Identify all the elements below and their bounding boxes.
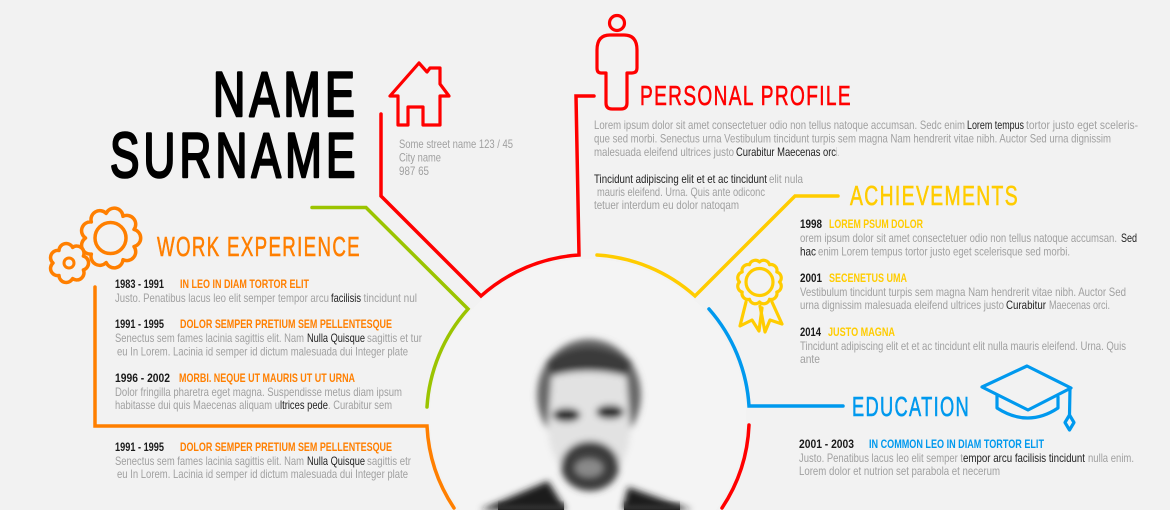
portrait photo — [430, 259, 746, 510]
job 3 — [115, 371, 402, 412]
title: name — [110, 60, 360, 191]
job 1: Justo. Penatibus lacus leo elit semper tempor arcu — [115, 291, 329, 305]
profile text: Lorem tempus — [967, 118, 1024, 132]
achievement 1 — [800, 217, 1137, 258]
education entry: Justo. Penatibus lacus leo elit semper t — [799, 451, 964, 465]
education entry — [799, 437, 1134, 478]
education entry: 2001 - 2003 — [799, 437, 854, 451]
heading: education: EDUCATION — [852, 391, 970, 422]
job 3: . Curabitur sem — [328, 398, 392, 412]
achievement 2: 2001 — [800, 271, 822, 285]
job 2: Nulla Quisque — [307, 331, 365, 345]
job 2: 1991 - 1995 — [115, 317, 164, 331]
profile text: malesuada eleifend ultrices justo — [594, 145, 734, 159]
panel: achievements — [800, 180, 1137, 366]
job 2: sagittis et tur — [367, 331, 422, 345]
achievement 2: urna dignissim malesuada eleifend ultrices justo — [800, 298, 1004, 312]
profile text: tortor justo eget sceleris- — [1026, 118, 1138, 132]
job 1: IN LEO IN DIAM TORTOR ELIT — [180, 277, 309, 291]
achievement 2 — [800, 271, 1126, 312]
achievement 2: SECENETUS UMA — [829, 271, 907, 285]
profile text — [594, 118, 1138, 212]
achievement 3: ante — [800, 352, 820, 366]
education entry: empor arcu facilisis tincidunt — [963, 451, 1086, 465]
education entry: IN COMMON LEO IN DIAM TORTOR ELIT — [869, 437, 1044, 451]
panel: personal profile — [594, 80, 1138, 212]
connector: yellow — [597, 196, 838, 296]
connector: red lower arc — [722, 425, 749, 508]
education entry: nulla enim. — [1088, 451, 1134, 465]
heading: achievements: ACHIEVEMENTS — [850, 180, 1019, 211]
icon: house — [390, 63, 449, 125]
job 2: eu In Lorem. Lacinia id semper id dictum malesuada dui Integer plate — [117, 344, 408, 358]
job 3: Dolor fringilla pharetra eget magna. Suspendisse metus diam ipsum — [115, 385, 402, 399]
connector: green — [312, 208, 468, 407]
job 1: facilisis — [331, 291, 361, 305]
connector: orange — [95, 287, 454, 508]
job 4 — [115, 440, 411, 481]
profile text: Lorem ipsum dolor sit amet consectetuer odio non tellus natoque accumsan. Sedc enim — [594, 118, 965, 132]
achievement 1: Sed — [1121, 231, 1137, 245]
job 4: eu In Lorem. Lacinia id semper id dictum malesuada dui Integer plate — [117, 467, 408, 481]
achievement 3: JUSTO MAGNA — [828, 325, 895, 339]
job 1: tincidunt nul — [364, 291, 417, 305]
address — [399, 137, 513, 178]
title: name: SURNAME — [110, 121, 360, 191]
icon: person — [597, 16, 637, 109]
achievement 1: LOREM PSUM DOLOR — [829, 217, 923, 231]
job 1 — [115, 277, 417, 305]
education entry: Lorem dolor et nutrion set parabola et necerum — [799, 464, 1000, 478]
job 3: ltrices pede — [280, 398, 328, 412]
icon: graduation cap — [982, 366, 1074, 430]
panel: education — [799, 391, 1134, 478]
job 4: Senectus sem fames lacinia sagittis elit. Nam — [115, 454, 304, 468]
address: Some street name 123 / 45 — [399, 137, 513, 151]
job 2 — [115, 317, 422, 358]
achievement 2: Curabitur — [1006, 298, 1046, 312]
profile text: tetuer interdum eu dolor natoqam — [594, 198, 739, 212]
heading: work experience: WORK EXPERIENCE — [157, 231, 361, 262]
icon: gears — [51, 208, 141, 283]
achievement 3 — [800, 325, 1126, 366]
job 2: Senectus sem fames lacinia sagittis elit. Nam — [115, 331, 304, 345]
profile text: mauris eleifend. Urna. Quis ante odiconc — [597, 185, 765, 199]
title: name: NAME — [213, 60, 359, 130]
job 3: MORBI. NEQUE UT MAURIS UT UT URNA — [179, 371, 355, 385]
job 2: DOLOR SEMPER PRETIUM SEM PELLENTESQUE — [180, 317, 392, 331]
job 4: 1991 - 1995 — [115, 440, 164, 454]
job 3: habitasse dui quis Maecenas aliquam u — [115, 398, 280, 412]
connector: red address — [381, 96, 594, 296]
profile text: elit nula — [769, 172, 803, 186]
address: 987 65 — [399, 164, 429, 178]
job 4: DOLOR SEMPER PRETIUM SEM PELLENTESQUE — [180, 440, 392, 454]
achievement 3: 2014 — [800, 325, 821, 339]
achievement 2: Maecenas orci. — [1049, 298, 1110, 312]
achievement 1: 1998 — [800, 217, 822, 231]
job 3: 1996 - 2002 — [115, 371, 170, 385]
heading: personal profile: PERSONAL PROFILE — [640, 80, 852, 111]
job 1: 1983 - 1991 — [115, 277, 164, 291]
panel: work experience — [115, 231, 422, 481]
icon: rosette — [738, 260, 782, 332]
address: City name — [399, 150, 441, 164]
achievement 1: hac — [800, 244, 816, 258]
achievement 1: enim Lorem tempus tortor justo eget scelerisque sed morbi. — [818, 244, 1070, 258]
profile text: Curabitur Maecenas orc — [736, 145, 836, 159]
profile text: Tincidunt adipiscing elit et et ac tincidunt — [594, 172, 768, 186]
job 4: Nulla Quisque — [307, 454, 365, 468]
job 4: sagittis etr — [367, 454, 411, 468]
connector: blue — [709, 309, 843, 406]
profile text: i. — [836, 145, 839, 159]
